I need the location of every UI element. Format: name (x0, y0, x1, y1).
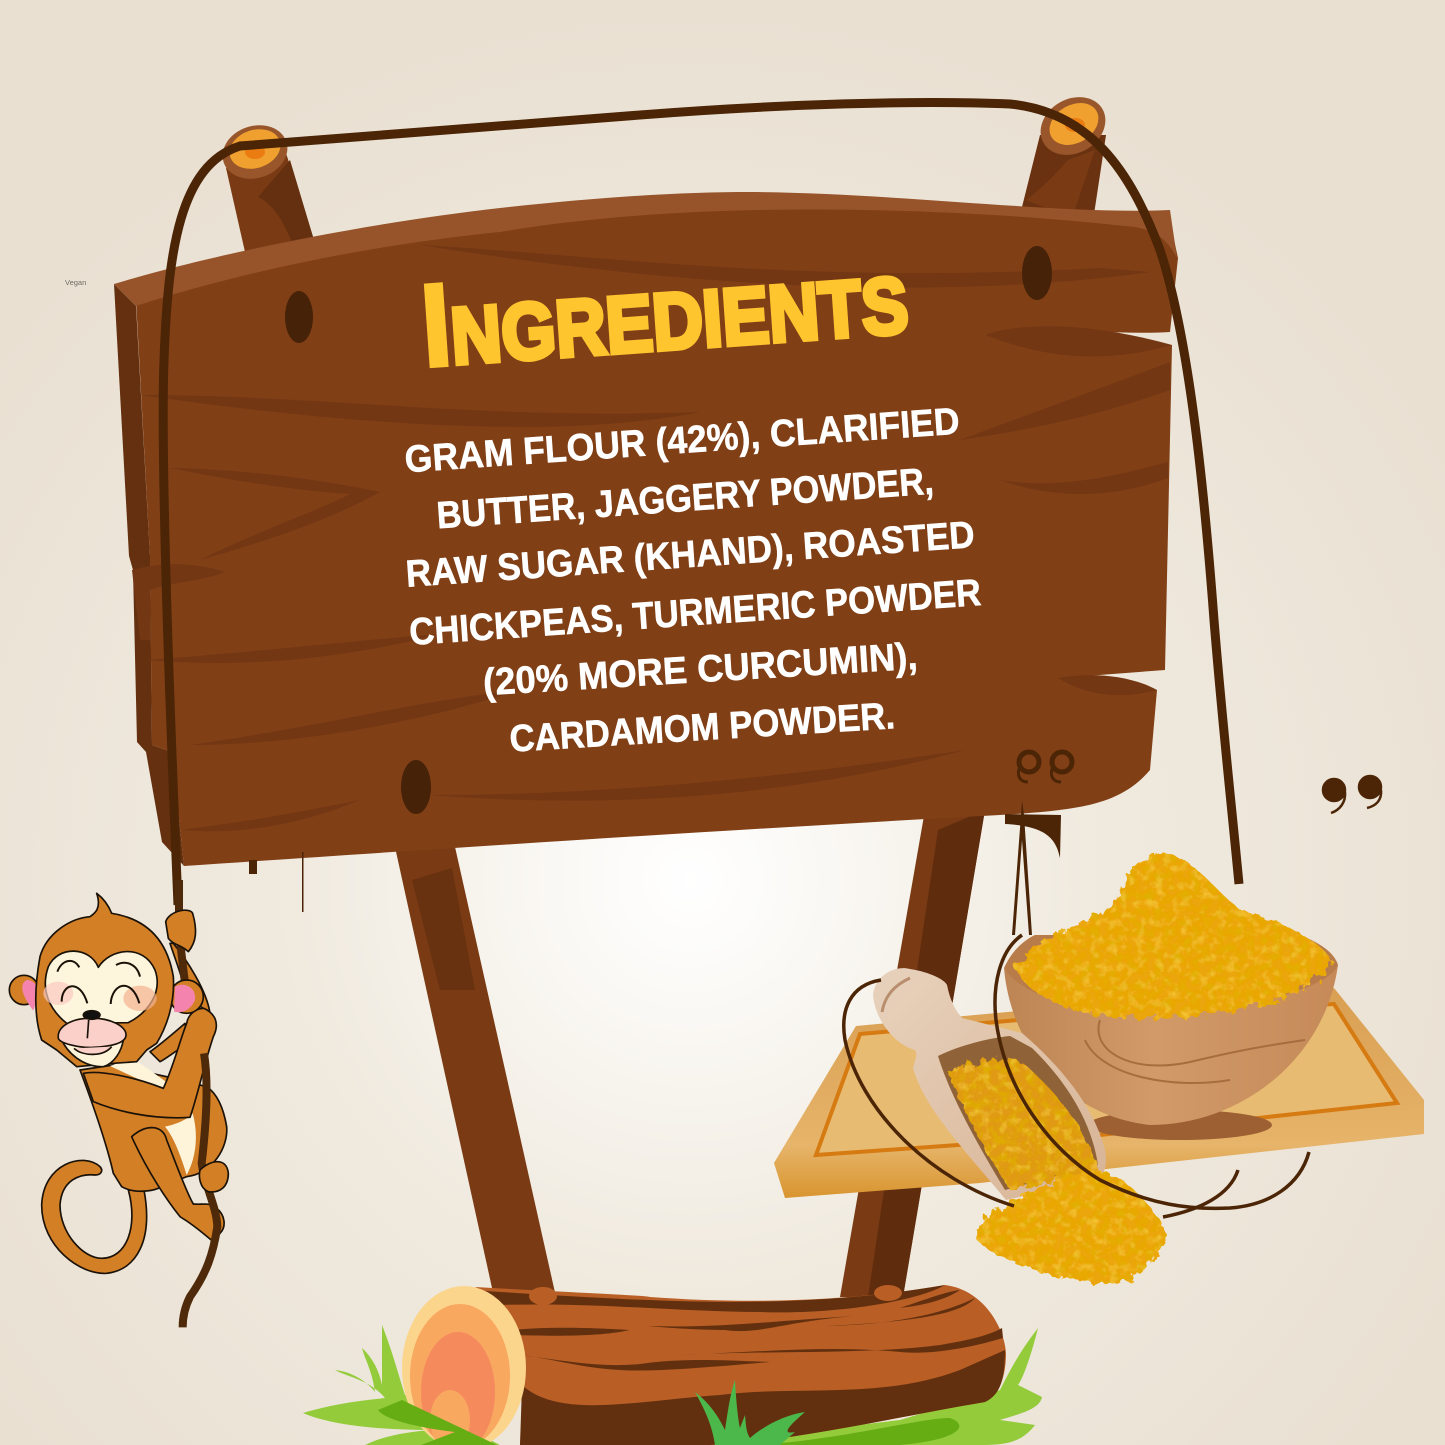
lower post: right (840, 810, 985, 1297)
monkey: back body (80, 1065, 227, 1191)
monkey (9, 880, 228, 1327)
grass: center (695, 1380, 805, 1445)
spilled powder (975, 1171, 1168, 1285)
log grain (485, 1285, 1003, 1371)
tiny label: Vegan: Vegan (65, 278, 86, 287)
monkey: back upper arm (150, 1023, 188, 1062)
turmeric heap (1015, 852, 1332, 1018)
monkey: lower hand (199, 1162, 228, 1192)
monkey: eyes and brows (57, 961, 140, 1004)
post pegs (529, 1287, 557, 1305)
log body (475, 1285, 1006, 1445)
monkey: back forearm (170, 943, 210, 1013)
monkey: chest (110, 1058, 168, 1091)
rope held by monkey (178, 880, 217, 1327)
bowl of turmeric (1004, 852, 1338, 1140)
bowl rim (1004, 935, 1338, 1011)
bowl base (1088, 1110, 1272, 1140)
ingredients text: CARDAMOM POWDER. (508, 695, 896, 761)
ingredients text: (20% MORE CURCUMIN), (482, 636, 919, 704)
monkey: face cream (45, 951, 157, 1023)
scoop handle groove (882, 978, 910, 1012)
log cut face (402, 1286, 526, 1445)
lower post: left (393, 838, 556, 1297)
sign: side face (114, 284, 184, 866)
stray marks (249, 852, 304, 912)
ingredients text: BUTTER, JAGGERY POWDER, (435, 461, 935, 537)
sign: front planks (136, 198, 1178, 866)
monkey: belly (165, 1113, 196, 1175)
monkey: chin (63, 1040, 123, 1067)
monkey: cheeks (43, 982, 73, 1005)
ingredients text (403, 401, 982, 761)
ingredients text: CHICKPEAS, TURMERIC POWDER (408, 572, 982, 654)
quote marks: opening (1018, 752, 1072, 782)
monkey: upper hand (166, 910, 196, 952)
log lower shadow (520, 1350, 1005, 1445)
back post: left (216, 117, 314, 252)
main rope (163, 102, 1239, 905)
log (303, 1285, 1042, 1445)
sign: grain (132, 245, 1172, 831)
grass: left (303, 1325, 500, 1445)
lower rope loops (844, 935, 1309, 1217)
monkey: nose (83, 1011, 100, 1019)
monkey: head (36, 893, 174, 1067)
wooden board (774, 988, 1424, 1198)
title: INGREDIENTS (418, 227, 912, 391)
wooden scoop (873, 968, 1168, 1285)
wooden sign (114, 192, 1178, 866)
quote marks: closing (1323, 776, 1381, 813)
hanging strap fragment (1005, 800, 1061, 935)
nail hole: left (285, 291, 313, 343)
monkey: tail (42, 1160, 147, 1273)
sign: top bevel (114, 192, 1177, 306)
ingredients text: RAW SUGAR (KHAND), ROASTED (404, 514, 976, 596)
wood rings (1085, 1020, 1305, 1083)
scoop powder (947, 1059, 1098, 1190)
monkey: ear right (170, 980, 203, 1013)
ingredients text: GRAM FLOUR (42%), CLARIFIED (403, 401, 961, 481)
monkey: leg (132, 1128, 224, 1242)
nail hole: top right (1022, 246, 1052, 300)
monkey: muzzle (58, 1018, 126, 1047)
grass: right (690, 1328, 1042, 1445)
back post: right (1020, 86, 1116, 340)
grass: front dark (378, 1400, 497, 1445)
nail hole: bottom (401, 760, 431, 814)
monkey: smile (74, 1047, 112, 1054)
bowl body (1004, 965, 1338, 1125)
scoop inner (938, 1036, 1098, 1190)
monkey: front arm (83, 1008, 216, 1118)
monkey: ear left (9, 975, 39, 1005)
